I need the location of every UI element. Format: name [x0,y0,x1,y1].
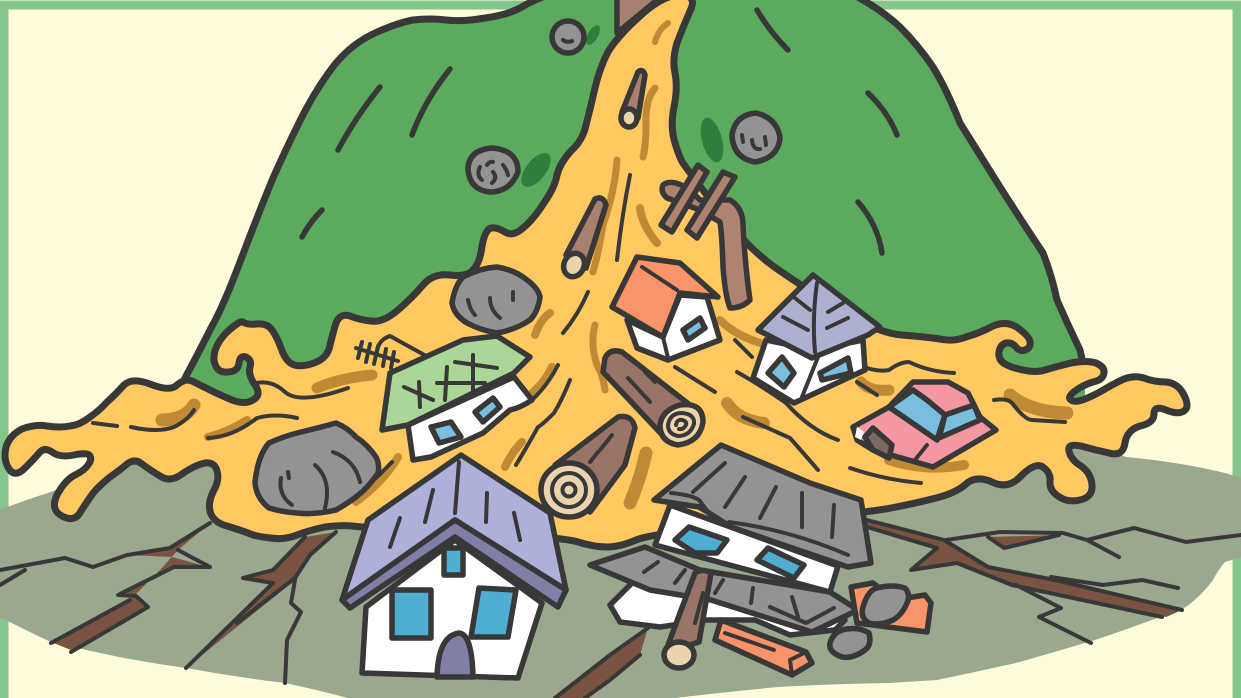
house: purple roof [753,275,880,403]
ground cracks [0,520,1241,698]
boulder: centre [452,267,540,333]
wall windows [675,527,727,553]
mountain slope marks [302,10,897,253]
vent window [444,548,463,575]
orange brick pile [830,583,931,657]
small rock: right slope [732,113,780,162]
brown trunk at summit [617,0,663,33]
boulder: lower left [255,423,379,514]
log: right [603,351,703,445]
ground [0,432,1241,698]
broken fence and beam [661,165,750,308]
leaves on slope [516,23,728,192]
house: green roof [382,336,532,460]
small log: top [621,71,645,127]
mudflow [5,0,1187,547]
crack: left centre [186,532,336,683]
crack: right [867,520,1241,643]
roof [342,455,566,600]
left window [392,590,431,638]
log: centre [541,416,635,517]
small log: middle [560,198,606,280]
house body [362,540,542,678]
log: front [664,570,711,668]
mud smears [162,23,1067,503]
crack: far left [0,523,210,652]
orange brick [715,620,812,675]
house: collapsed grey roof [590,445,871,635]
roof lines [390,462,520,547]
antenna [356,336,428,368]
small rock: top [552,21,584,53]
small rock: left slope [468,148,518,192]
lower roof [590,547,858,632]
upper white wall [655,505,838,592]
car [853,382,996,467]
mud flow lines [93,175,1065,497]
roof edge band [342,520,566,608]
house: orange roof [612,257,720,360]
door [437,633,473,677]
lower white wall [610,570,845,635]
upper roof [654,445,871,567]
right window [471,588,516,637]
crack: bottom centre [555,628,648,698]
mountain [185,0,1085,420]
house: front large [342,455,566,678]
